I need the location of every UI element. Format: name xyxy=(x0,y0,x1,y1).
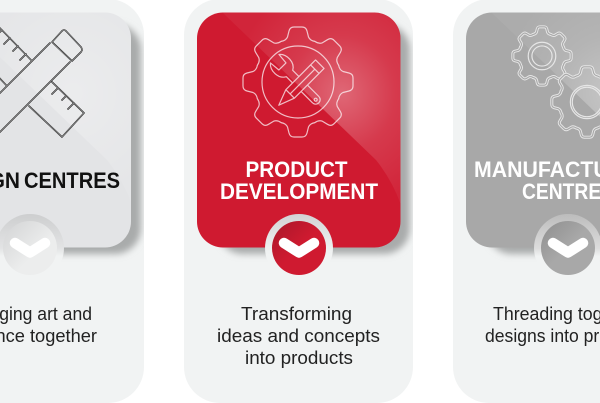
gloss: product development xyxy=(222,12,401,205)
heading: product development: PRODUCT xyxy=(246,157,348,182)
icon: gear with wrench and pencil xyxy=(243,27,353,137)
description: product development: into products xyxy=(245,347,353,368)
card shadow: product development xyxy=(217,24,410,254)
icon: small gear xyxy=(513,27,571,85)
heading: manufacturing centres xyxy=(474,157,600,204)
gloss: design centres xyxy=(0,12,132,205)
heading: product development: DEVELOPMENT xyxy=(220,179,379,204)
heading: design centres: CENTRES xyxy=(24,168,120,193)
button: product development xyxy=(265,214,333,282)
panel: manufacturing centres xyxy=(453,0,600,403)
card background: product development xyxy=(184,0,413,403)
description: product development: Transforming xyxy=(241,303,352,324)
button: design centres xyxy=(0,214,64,282)
icon: large gear xyxy=(552,67,600,137)
card shadow: design centres xyxy=(63,22,144,258)
heading: product development xyxy=(220,157,379,204)
card background: manufacturing centres xyxy=(453,0,600,403)
button: manufacturing centres xyxy=(534,214,600,282)
panel: design centres xyxy=(0,0,144,403)
panel: product development xyxy=(184,0,413,403)
tile: product development xyxy=(197,12,400,248)
icon: pencil and ruler xyxy=(0,23,84,137)
tile: design centres xyxy=(0,12,131,248)
description: manufacturing centres xyxy=(485,303,600,346)
description: design centres xyxy=(0,303,97,346)
card shadow: manufacturing centres xyxy=(490,248,535,258)
description: product development: ideas and concepts xyxy=(217,325,380,346)
card background: design centres xyxy=(0,0,144,403)
gloss: manufacturing centres xyxy=(539,12,600,116)
description: product development xyxy=(217,303,380,368)
tile: manufacturing centres xyxy=(466,12,600,248)
